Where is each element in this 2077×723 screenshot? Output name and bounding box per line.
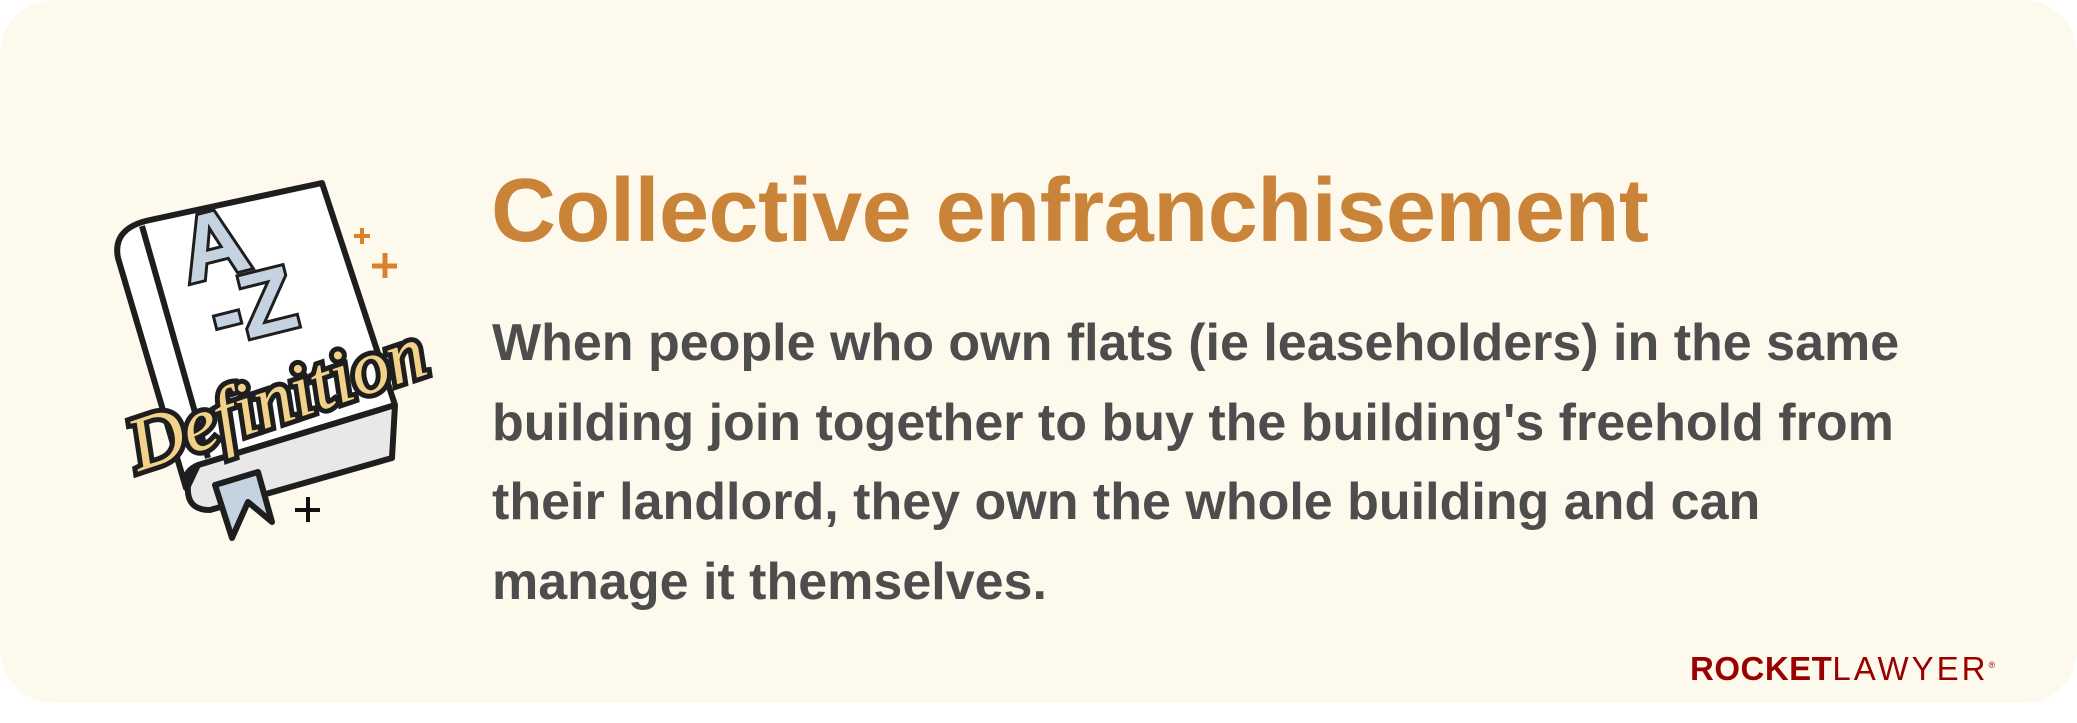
body text: manage it themselves. (492, 552, 1047, 610)
title: Collective enfranchisement (491, 161, 1648, 261)
body text (492, 314, 1899, 610)
logo: Rocket Lawyer: ROCKETLAWYER® (1690, 650, 1995, 687)
icon: A-Z definition book (114, 180, 436, 541)
icon: A-Z definition book: Definition (116, 310, 436, 488)
icon: A-Z definition book: A (169, 188, 258, 303)
icon: A-Z definition book: -Z (199, 248, 306, 365)
body text: building join together to buy the building's freehold from (492, 394, 1894, 452)
body text: their landlord, they own the whole building and can (492, 473, 1760, 531)
body text: When people who own flats (ie leaseholders) in the same (492, 314, 1899, 372)
